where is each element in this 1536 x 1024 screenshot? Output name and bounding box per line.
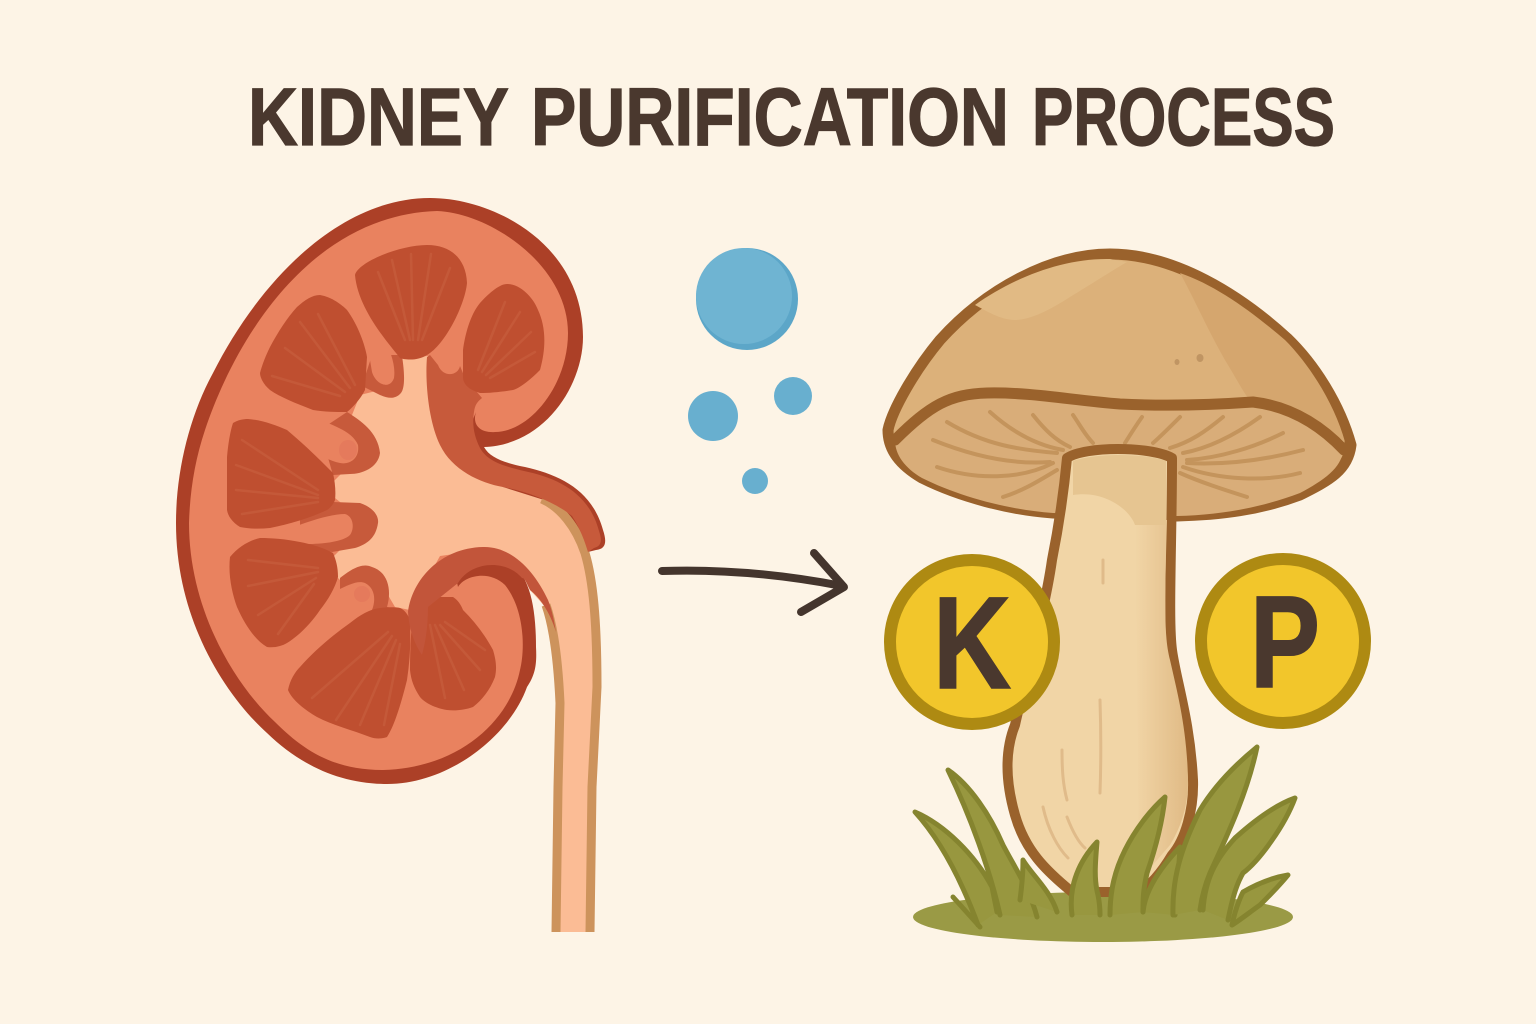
stem top shading — [1073, 455, 1166, 525]
calyx glow: left — [339, 440, 357, 460]
droplet: small — [742, 468, 768, 494]
stem fibres — [1043, 560, 1103, 858]
calyx wall: lower — [340, 565, 400, 630]
medulla lobes — [227, 245, 544, 738]
cortex finger: lower — [320, 582, 374, 640]
kidney cortex — [189, 211, 568, 770]
cap shadow — [1180, 273, 1345, 442]
calyx glow: lower — [354, 586, 370, 602]
gill lines — [933, 412, 1303, 497]
potassium badge: K — [933, 569, 1011, 716]
gills underside — [895, 393, 1342, 516]
calyx wall: upper — [362, 355, 404, 398]
cap highlight — [975, 259, 1127, 320]
title: PURIFICATION — [531, 72, 1009, 163]
kidney outer capsule — [176, 198, 605, 784]
arrow — [662, 553, 844, 612]
stem right shading — [1135, 520, 1188, 880]
cortex finger: upper — [360, 300, 394, 385]
mushroom illustration — [888, 254, 1351, 942]
hilum arc wall — [408, 547, 556, 655]
water droplets — [688, 248, 812, 494]
kidney illustration — [176, 198, 605, 932]
renal pelvis and ureter fill — [325, 356, 596, 932]
droplet: middle right — [774, 377, 812, 415]
cortex finger: left — [310, 415, 358, 463]
mushroom cap — [888, 254, 1351, 516]
cap rim line — [895, 393, 1344, 450]
calyx wall: left — [320, 412, 380, 475]
phosphorus badge — [1201, 559, 1365, 723]
mushroom stem — [1008, 449, 1193, 892]
droplet: middle left — [688, 391, 738, 441]
potassium badge — [890, 560, 1054, 724]
renal vein wall — [426, 355, 601, 552]
title: KIDNEY — [248, 72, 509, 163]
title — [248, 72, 1335, 163]
calyx wall: middle — [300, 502, 378, 552]
cap spots — [1174, 354, 1204, 365]
cortex finger: middle — [270, 514, 353, 544]
phosphorus badge: P — [1250, 568, 1320, 715]
droplet: large — [696, 248, 798, 350]
ground — [913, 892, 1293, 942]
grass blades — [915, 747, 1295, 927]
ureter left wall — [546, 605, 560, 932]
title: PROCESS — [1032, 72, 1335, 163]
ureter right wall — [542, 499, 597, 932]
medulla stripes — [236, 254, 535, 725]
